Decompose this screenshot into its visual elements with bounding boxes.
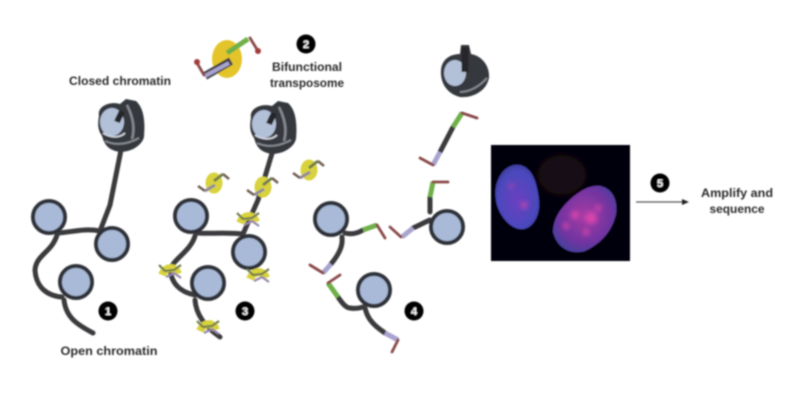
nucleus: right [553,186,616,252]
panel: step 4 tagged fragments [310,45,489,352]
fragment: nucleosome bottom [328,274,398,352]
fragment: free tagged [420,113,477,165]
nuclear speckles [508,183,601,235]
heading: closed chromatin: Closed chromatin [69,74,171,88]
fragment: nucleosome right [390,182,463,243]
free transposome [293,160,324,180]
label: bifunctional transposome: transposome [270,76,344,90]
label: amplify and sequence: sequence [710,202,765,216]
badge: step 4: 4 [411,306,418,318]
label: bifunctional transposome: Bifunctional [272,60,342,74]
heading: open chromatin: Open chromatin [60,344,158,358]
nucleosome: open 1 [33,201,65,233]
panel: step 3 transposome binding [159,101,324,337]
bound transposome [197,321,219,334]
panel: step 1 open and closed chromatin [33,99,144,333]
bound transposome [247,269,269,282]
label: bifunctional transposome [270,60,344,90]
nucleus: left [495,165,539,229]
nucleosome: 1 [175,200,207,232]
bound transposome [159,265,181,278]
chromatin strand [35,150,121,333]
nucleosome: 3 [192,267,224,299]
closed chromatin nucleosome [441,45,489,97]
badge: step 2: 2 [303,39,309,51]
badge: step 5: 5 [657,178,663,190]
badge: step 2 [296,34,316,54]
closed chromatin nucleosome [250,101,296,154]
badge: step 4 [404,302,424,320]
micrograph: stained nuclei [491,145,630,261]
cytoplasm haze [538,155,586,195]
bound transposome [247,176,278,198]
fragment: nucleosome left [310,203,385,273]
badge: step 5 [650,174,670,192]
arrow: to sequencing [636,199,689,205]
nucleosome: 2 [233,236,265,268]
badge: step 3 [236,302,254,320]
badge: step 3: 3 [242,306,248,318]
icon: bifunctional transposome [194,38,261,78]
chromatin strand [170,150,273,337]
nucleosome: open 3 [60,266,92,298]
label: amplify and sequence [701,186,773,216]
badge: step 1 [98,302,118,320]
closed chromatin nucleosome [98,99,144,152]
badge: step 1: 1 [105,306,111,318]
free transposome [198,172,229,194]
nucleosome: open 2 [96,228,128,260]
bound transposome [237,213,259,226]
label: amplify and sequence: Amplify and [701,186,773,200]
